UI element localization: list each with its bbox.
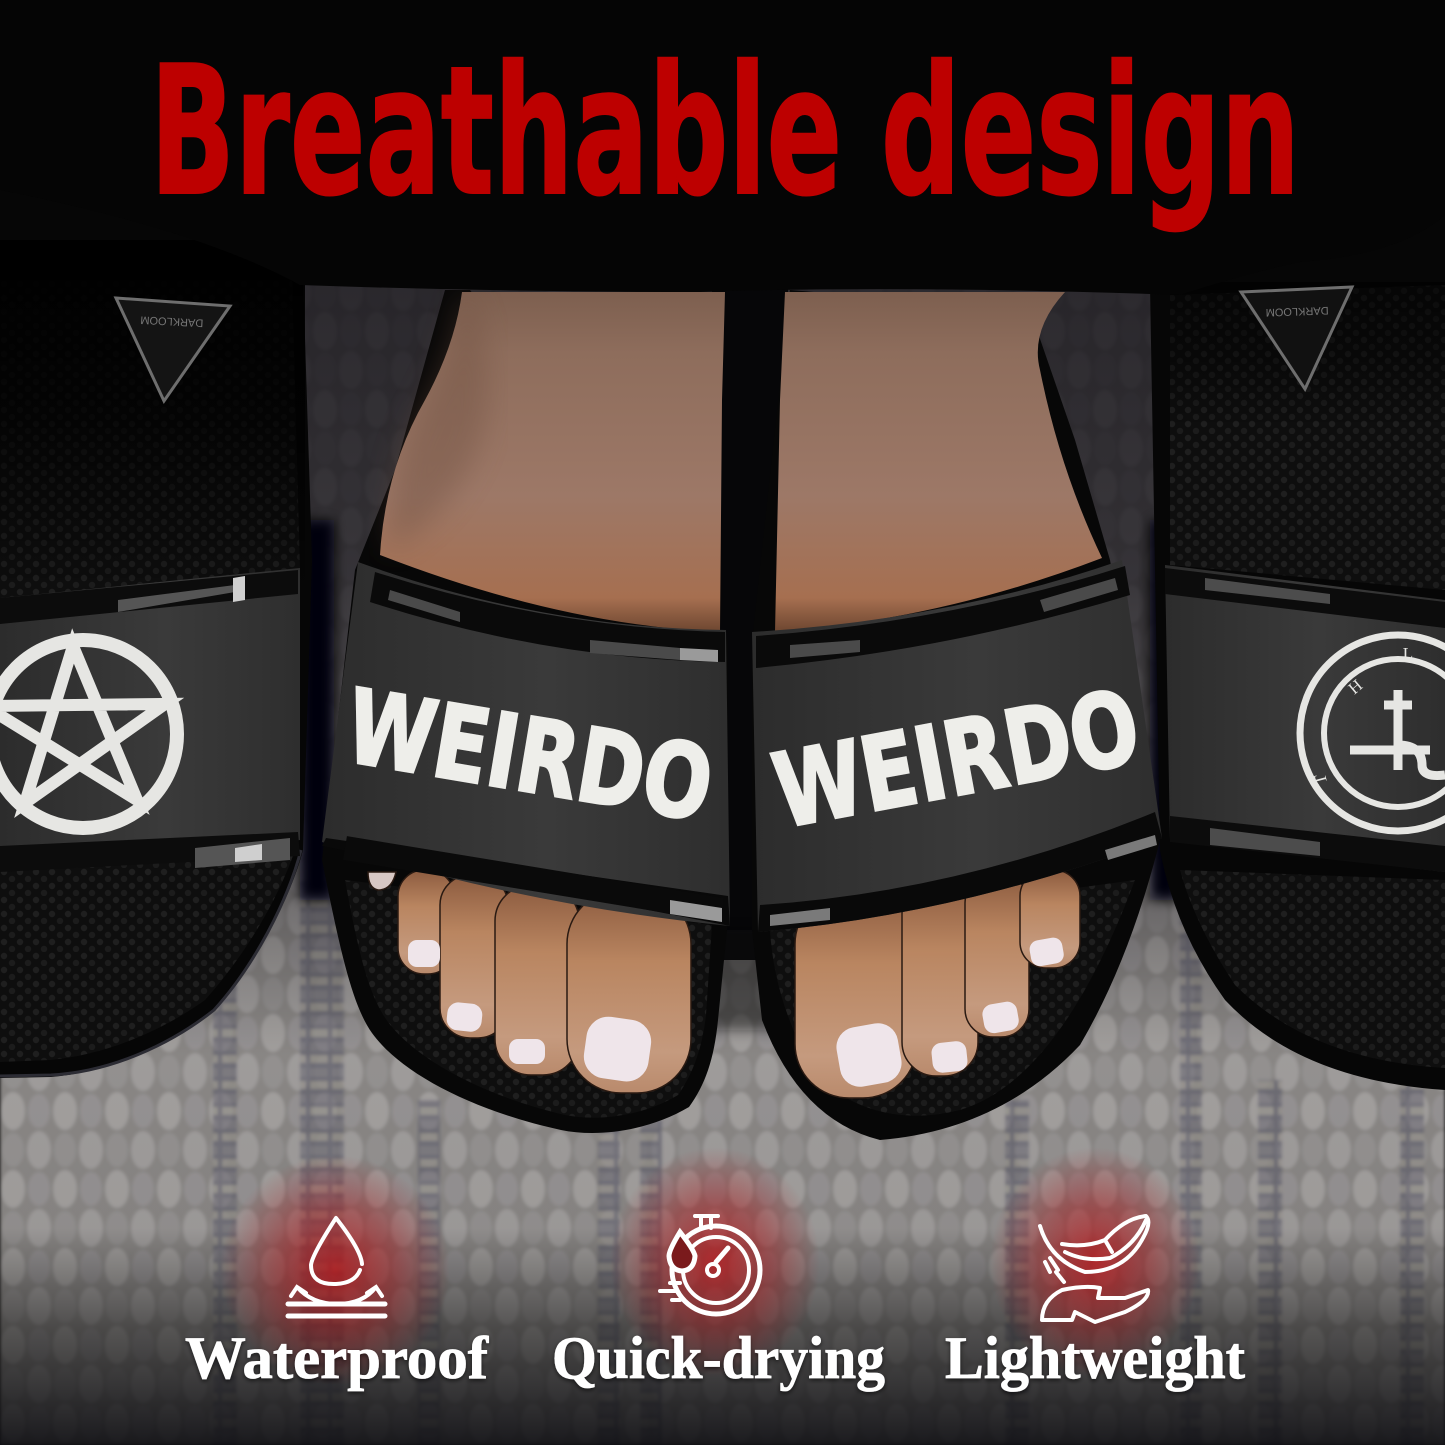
left outer slide with pentagram bbox=[0, 180, 312, 1078]
dark robe across top bbox=[0, 0, 1445, 295]
toes bbox=[368, 870, 691, 1093]
sole bbox=[322, 290, 728, 1133]
sigil of Lilith: L bbox=[1403, 644, 1413, 663]
right outer slide with sigil bbox=[1150, 210, 1445, 1090]
sigil of Lilith: T bbox=[1310, 771, 1331, 787]
footbed logo triangle bbox=[1241, 287, 1352, 389]
strap bbox=[0, 568, 300, 872]
sigil of Lilith: H bbox=[1345, 676, 1366, 698]
toes bbox=[795, 870, 1080, 1098]
footbed bbox=[0, 180, 312, 1078]
icon: stopwatch with drop bbox=[660, 1216, 760, 1314]
strap bbox=[752, 560, 1162, 932]
icon: waterproof drop over layers bbox=[288, 1218, 385, 1316]
left foot in WEIRDO slide bbox=[322, 290, 730, 1133]
sole bbox=[752, 290, 1160, 1140]
toenails bbox=[833, 936, 1065, 1090]
right foot in WEIRDO slide bbox=[752, 290, 1162, 1140]
icon: feather light slide over hand bbox=[1040, 1216, 1148, 1322]
footbed logo triangle bbox=[116, 298, 230, 401]
label: Lightweight: Lightweight bbox=[945, 1325, 1245, 1391]
label: Quick-drying: Quick-drying bbox=[552, 1325, 885, 1391]
strap bbox=[1165, 565, 1445, 872]
leg and instep bbox=[380, 292, 725, 632]
footbed logo triangle: DARKLOOM bbox=[1265, 304, 1329, 318]
red glows behind icons bbox=[220, 1147, 1200, 1385]
footbed logo triangle: DARKLOOM bbox=[140, 313, 204, 329]
strap text WEIRDO: WEIRDO bbox=[338, 667, 721, 846]
pentagram bbox=[0, 640, 177, 828]
leg and instep bbox=[775, 292, 1102, 632]
strap bbox=[322, 562, 730, 926]
footbed bbox=[1150, 210, 1445, 1090]
strap text WEIRDO: WEIRDO bbox=[765, 668, 1148, 852]
sigil of Lilith bbox=[1300, 635, 1445, 831]
toenails bbox=[408, 940, 654, 1084]
label: Waterproof: Waterproof bbox=[185, 1325, 489, 1391]
